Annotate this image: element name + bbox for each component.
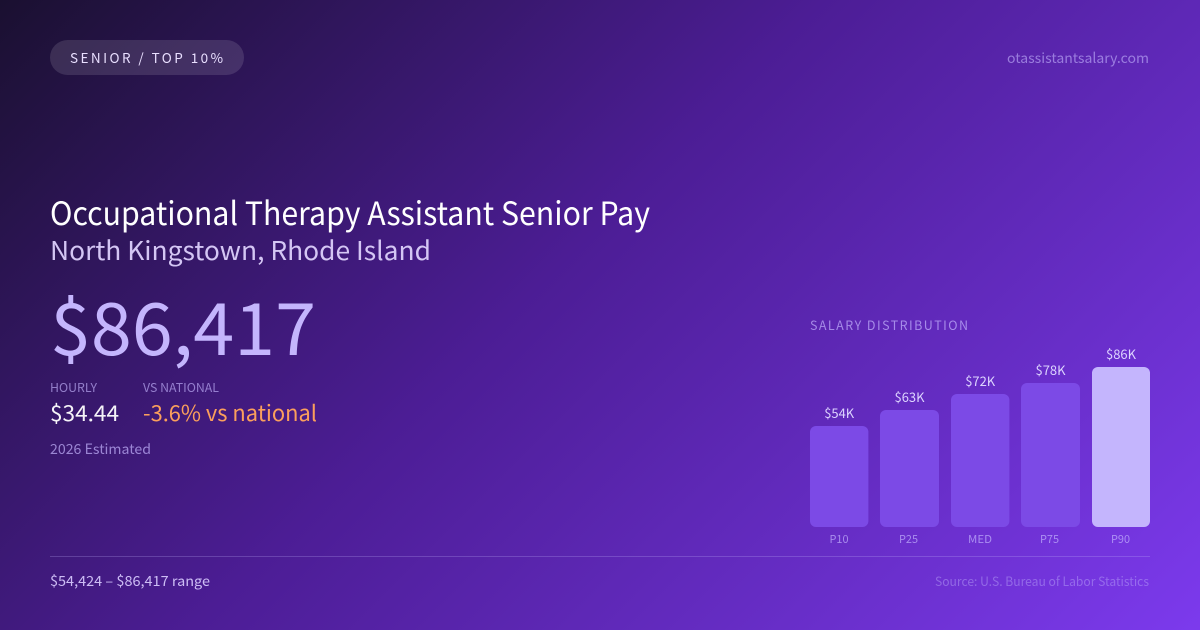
stat: hourly: HOURLY (50, 379, 98, 396)
badge: senior / top 10% (50, 40, 244, 75)
bar: MED: MED (968, 531, 992, 547)
bar: P90 highlighted (1092, 344, 1150, 547)
source note: Source: U.S. Bureau of Labor Statistics (935, 571, 1149, 590)
stat: hourly: $34.44 (50, 396, 119, 428)
bar: P75 (1021, 360, 1080, 547)
bar: P10 (810, 403, 868, 547)
bar: P25: $63K (894, 387, 925, 406)
site url: otassistantsalary.com (1007, 48, 1149, 68)
badge: senior / top 10%: SENIOR / TOP 10% (70, 47, 223, 67)
bar: P25 (880, 387, 939, 547)
title: Occupational Therapy Assistant Senior Pay (50, 189, 650, 235)
bar: MED (951, 371, 1009, 547)
bar: P10: $54K (824, 403, 855, 422)
stat: hourly (50, 379, 119, 428)
main salary figure: $86,417 (50, 271, 316, 376)
stat: vs national: -3.6% vs national (143, 396, 317, 428)
stat: vs national (143, 379, 317, 428)
bar: P25: P25 (899, 531, 918, 547)
chart heading: SALARY DISTRIBUTION (810, 315, 968, 334)
bar: P90 highlighted: P90 (1111, 531, 1130, 547)
bar: MED: $72K (965, 371, 996, 390)
salary range: $54,424 – $86,417 range (50, 571, 210, 591)
subtitle: location: North Kingstown, Rhode Island (50, 231, 431, 268)
chart: salary distribution (810, 315, 1150, 547)
bar: P75: $78K (1036, 360, 1066, 379)
bar: P90 highlighted: $86K (1106, 344, 1137, 363)
estimate note: 2026 Estimated (50, 439, 151, 459)
bar: P10: P10 (830, 531, 848, 547)
bar: P75: P75 (1040, 531, 1059, 547)
stat: vs national: VS NATIONAL (143, 379, 219, 396)
